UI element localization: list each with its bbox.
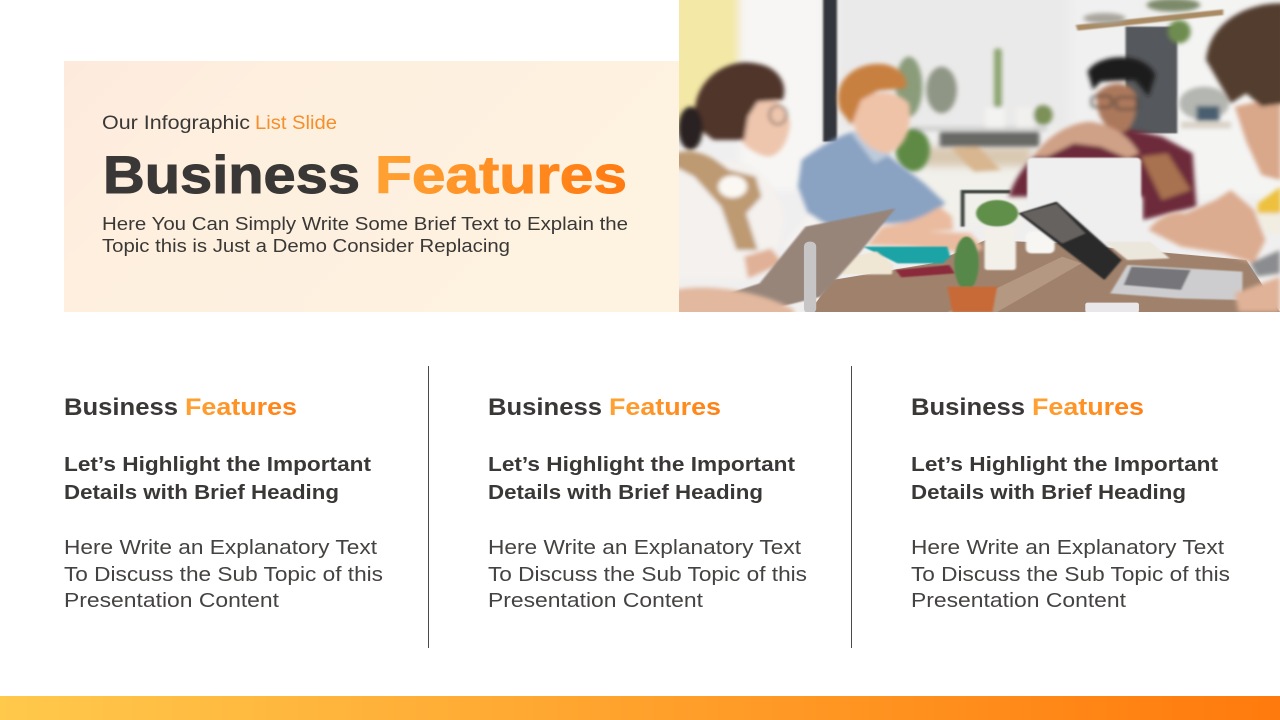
column 1 subheading [64,454,371,504]
column 3 heading [911,394,1144,421]
column 1 body text [64,537,383,612]
column 3 body text: Presentation Content [911,590,1127,612]
title: Features [375,146,627,205]
column 3 body text [911,537,1230,612]
eyebrow heading: List Slide [255,113,337,134]
person: man with dreadlocks [1009,57,1196,220]
column 2 heading [488,394,721,421]
column 2 subheading [488,454,795,504]
column 1 body text: Presentation Content [64,590,280,612]
header description: Here You Can Simply Write Some Brief Text to Explain the [102,214,628,234]
counter and plants [913,126,1047,131]
laptop left [729,208,896,312]
column 1 body text: Here Write an Explanatory Text [64,537,377,559]
column 1 heading: Business [64,394,178,421]
column 2 subheading: Let’s Highlight the Important [488,454,795,476]
person: hands and head right [1149,3,1280,312]
header description [102,214,628,256]
header panel [64,61,679,312]
potted plant and cup [947,200,1055,312]
column 3 heading: Features [1032,394,1144,421]
header description: Topic this is Just a Demo Consider Replacing [102,236,510,256]
column 2 body text [488,537,807,612]
eyebrow heading: Our Infographic [102,113,250,134]
column 1 heading: Features [185,394,297,421]
column 2 heading: Business [488,394,602,421]
column 2 [488,394,807,612]
person: woman left [671,62,790,280]
column 1 subheading: Details with Brief Heading [64,482,339,504]
column 1 heading [64,394,297,421]
column 3 subheading: Details with Brief Heading [911,482,1186,504]
shelf [1076,9,1223,31]
column 3 body text: Here Write an Explanatory Text [911,537,1224,559]
title: Business [103,146,360,205]
column 1 body text: To Discuss the Sub Topic of this [64,564,383,586]
column 3 heading: Business [911,394,1025,421]
column 2 subheading: Details with Brief Heading [488,482,763,504]
laptop right [1018,202,1242,300]
column 2 body text: To Discuss the Sub Topic of this [488,564,807,586]
white laptop back [1025,156,1143,221]
window frame [823,0,837,142]
photo: team meeting [679,0,1280,312]
column 3 subheading [911,454,1218,504]
column 1 subheading: Let’s Highlight the Important [64,454,371,476]
column 3 body text: To Discuss the Sub Topic of this [911,564,1230,586]
notebooks and phone [840,242,1170,277]
person: man with red hair [782,64,984,253]
title [103,146,627,205]
column 3 [911,394,1230,612]
column 2 body text: Presentation Content [488,590,704,612]
column 2 heading: Features [609,394,721,421]
eyebrow heading [102,113,337,134]
table [809,240,1280,312]
column 3 subheading: Let’s Highlight the Important [911,454,1218,476]
footer gradient bar [0,696,1280,720]
column 1 [64,394,383,612]
column 2 body text: Here Write an Explanatory Text [488,537,801,559]
doorway [1126,27,1177,133]
